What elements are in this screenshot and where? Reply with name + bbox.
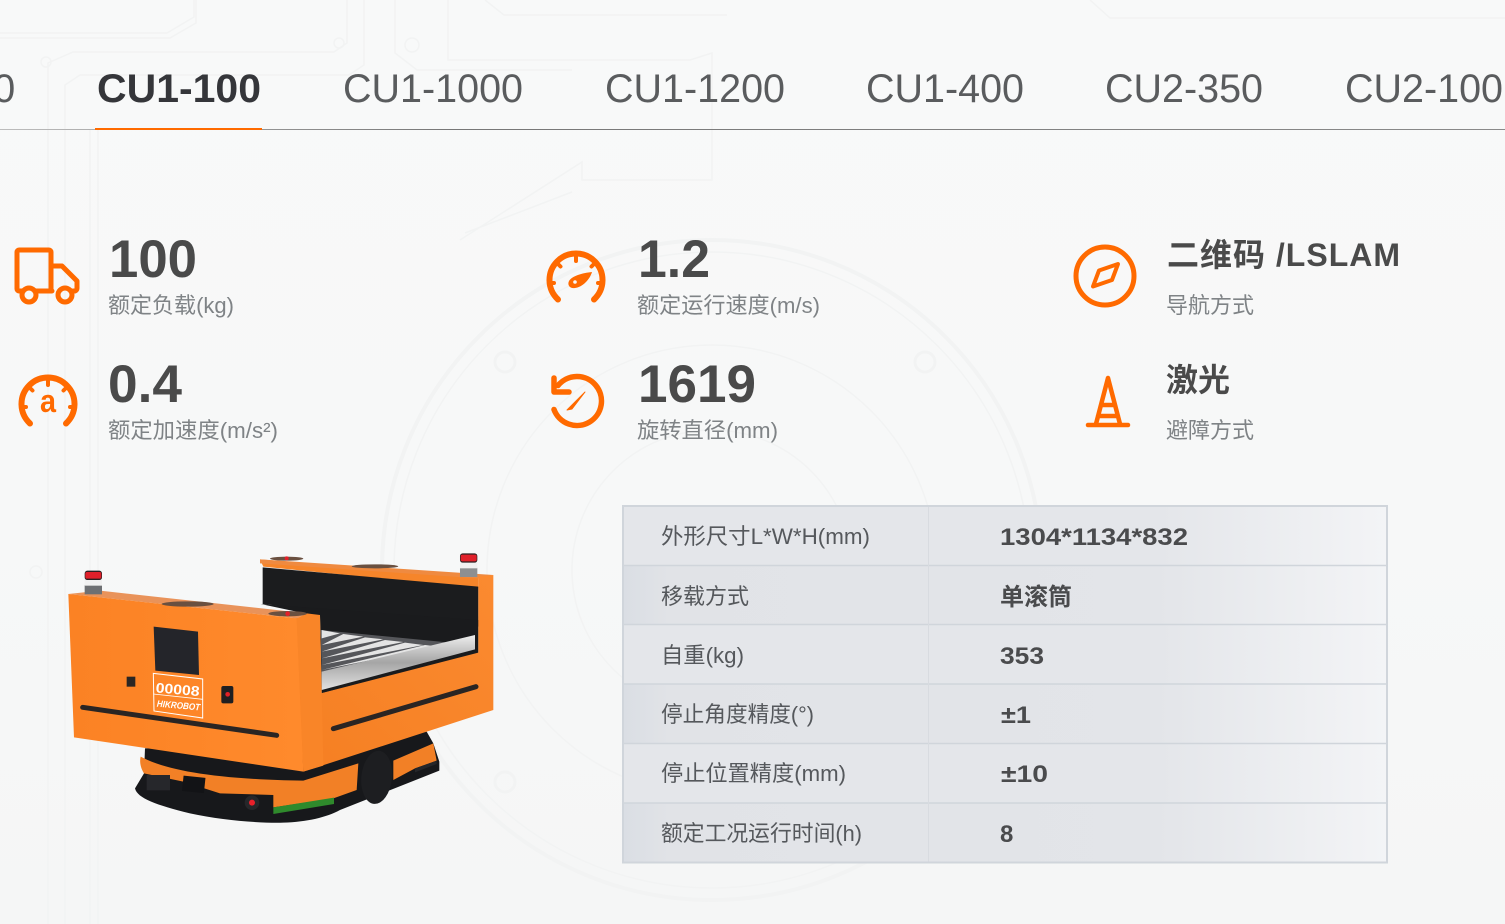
table row 4 xyxy=(623,684,1387,744)
front slot xyxy=(83,707,277,735)
label: 导航方式 xyxy=(1166,293,1254,318)
table row 1: 1304*1134*832 xyxy=(1000,524,1188,551)
rear wall xyxy=(260,559,493,627)
tab: CU1-400: CU1-400 xyxy=(866,67,1024,111)
label: 额定运行速度(m/s) xyxy=(637,293,820,318)
product tabs xyxy=(0,67,1505,130)
table grid xyxy=(623,506,1387,862)
label: 额定加速度(m/s²) xyxy=(108,418,278,443)
table row 4: ±1 xyxy=(1001,702,1031,729)
icon: traffic cone xyxy=(1088,378,1128,425)
table row 2: 移载方式 xyxy=(661,584,749,609)
icon: compass xyxy=(1076,247,1134,305)
tab: CU1-1000: CU1-1000 xyxy=(343,67,523,111)
tab baseline xyxy=(0,129,1505,130)
rollers xyxy=(261,604,478,693)
value: 1.2 xyxy=(638,230,710,289)
display screen xyxy=(154,627,199,675)
table row 2 xyxy=(623,566,1387,625)
spec: rated speed xyxy=(550,230,820,318)
specification table xyxy=(623,506,1387,862)
icon: speedometer xyxy=(550,254,602,300)
icon: rotation clock xyxy=(554,376,601,425)
value: 0.4 xyxy=(108,355,183,414)
front wall xyxy=(68,591,323,772)
HIKROBOT name plate xyxy=(153,673,203,718)
top buttons xyxy=(162,556,398,616)
table row 5: ±10 xyxy=(1001,761,1048,788)
table row 3: 353 xyxy=(1000,643,1044,670)
table row 6: 额定工况运行时间(h) xyxy=(661,821,862,846)
HIKROBOT name plate: HIKROBOT xyxy=(156,699,202,713)
value: 100 xyxy=(109,230,197,289)
table row 5: 停止位置精度(mm) xyxy=(661,761,846,786)
spec: obstacle avoidance method xyxy=(1088,362,1254,443)
icon: truck xyxy=(17,250,77,302)
HIKROBOT name plate: 00008 xyxy=(155,679,201,699)
table row 4: 停止角度精度(°) xyxy=(661,702,814,727)
icon: gauge with letter a: a xyxy=(40,383,56,419)
value: 二维码 /LSLAM xyxy=(1167,237,1400,273)
table row 2: 单滚筒 xyxy=(1000,584,1072,611)
side wall xyxy=(293,575,493,772)
label: 额定负载(kg) xyxy=(108,293,234,318)
icon: gauge with letter a xyxy=(22,378,74,424)
table row 3 xyxy=(623,625,1387,684)
table row 1 xyxy=(623,506,1387,566)
spec: turning diameter xyxy=(554,355,778,443)
table row 1: 外形尺寸L*W*H(mm) xyxy=(661,524,870,549)
table row 6 xyxy=(623,803,1387,862)
spec: rated acceleration xyxy=(22,355,278,443)
label: 旋转直径(mm) xyxy=(637,418,778,443)
signal light right xyxy=(460,553,477,577)
value: 1619 xyxy=(638,355,756,414)
active tab underline xyxy=(95,128,262,130)
product image: AGV robot xyxy=(68,553,493,823)
spec: navigation method xyxy=(1076,237,1400,318)
table row 6: 8 xyxy=(1000,821,1013,848)
spec: rated load xyxy=(17,230,234,318)
signal light left xyxy=(85,571,102,594)
value: 激光 xyxy=(1166,362,1230,398)
robot base xyxy=(135,732,439,823)
table row 3: 自重(kg) xyxy=(661,643,744,668)
label: 避障方式 xyxy=(1166,418,1254,443)
tab: CU1-1200: CU1-1200 xyxy=(605,67,785,111)
table row 5 xyxy=(623,744,1387,803)
tab: CU2-350: CU2-350 xyxy=(1105,67,1263,111)
side slot xyxy=(333,687,476,729)
tab: CU1-100 active: CU1-100 xyxy=(97,67,261,111)
tab: CU2-100: CU2-100 xyxy=(1345,67,1503,111)
